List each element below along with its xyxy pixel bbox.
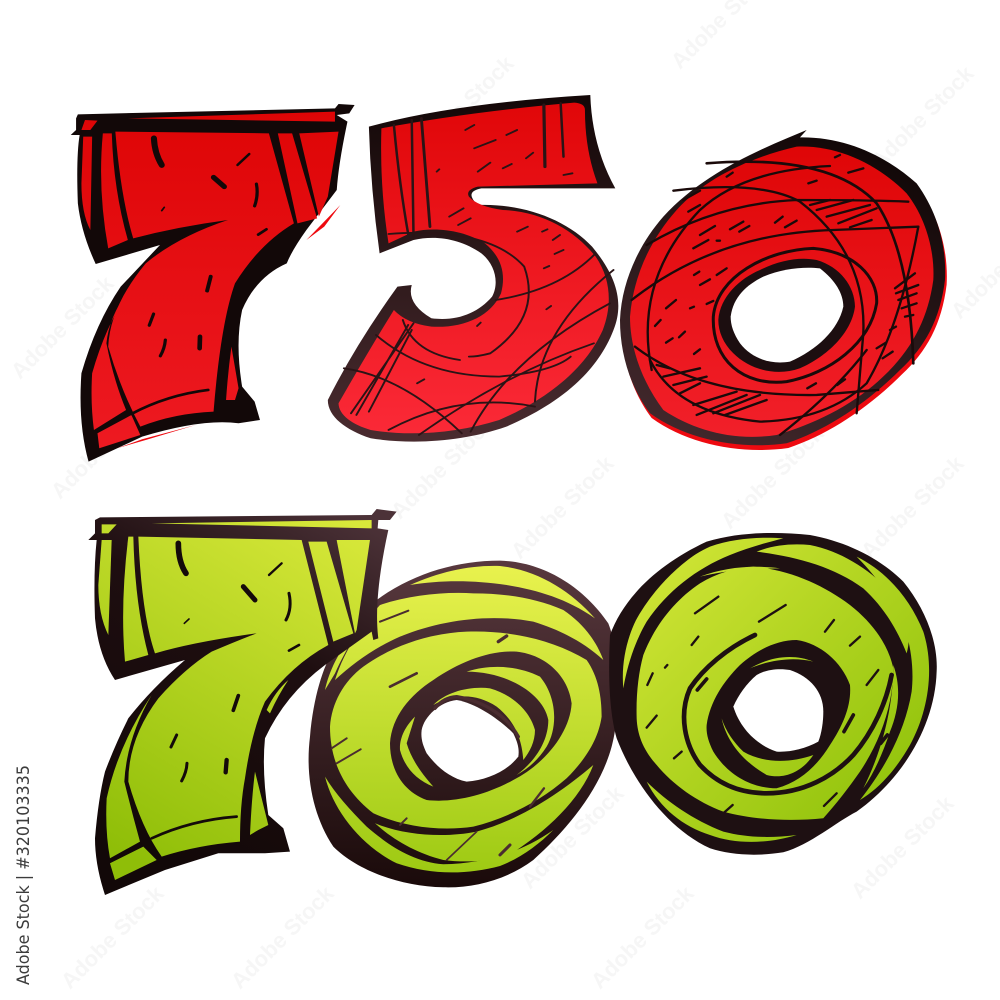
watermark: faint repeated stock text: Adobe Stock — [586, 880, 699, 994]
watermark: faint repeated stock text: Adobe Stock — [506, 450, 619, 564]
watermark: faint repeated stock text: Adobe Stock — [6, 270, 119, 384]
illustration: red five — [328, 95, 618, 442]
watermark: faint repeated stock text: Adobe Stock — [56, 880, 169, 994]
watermark: faint repeated stock text: Adobe Stock — [166, 110, 279, 224]
illustration: green left zero — [309, 561, 618, 887]
watermark: faint repeated stock text: Adobe Stock — [386, 410, 499, 524]
watermark: faint repeated stock text: Adobe Stock — [716, 420, 829, 534]
watermark: faint repeated stock text: Adobe Stock — [406, 50, 519, 164]
illustration: red zero — [620, 130, 947, 450]
watermark: faint repeated stock text: Adobe Stock — [516, 780, 629, 894]
watermark: faint repeated stock text: Adobe Stock — [856, 450, 969, 564]
illustration: green right zero — [609, 533, 937, 855]
watermark: faint repeated stock text: Adobe Stock — [46, 390, 159, 504]
stock credit text: Adobe Stock | #320103335 — [14, 765, 33, 985]
illustration: red seven — [71, 104, 355, 462]
watermark: faint repeated stock text: Adobe Stock — [846, 790, 959, 904]
illustration: green seven — [88, 509, 397, 895]
watermark: faint repeated stock text: Adobe Stock — [226, 880, 339, 994]
watermark: faint repeated stock text: Adobe Stock — [866, 60, 979, 174]
